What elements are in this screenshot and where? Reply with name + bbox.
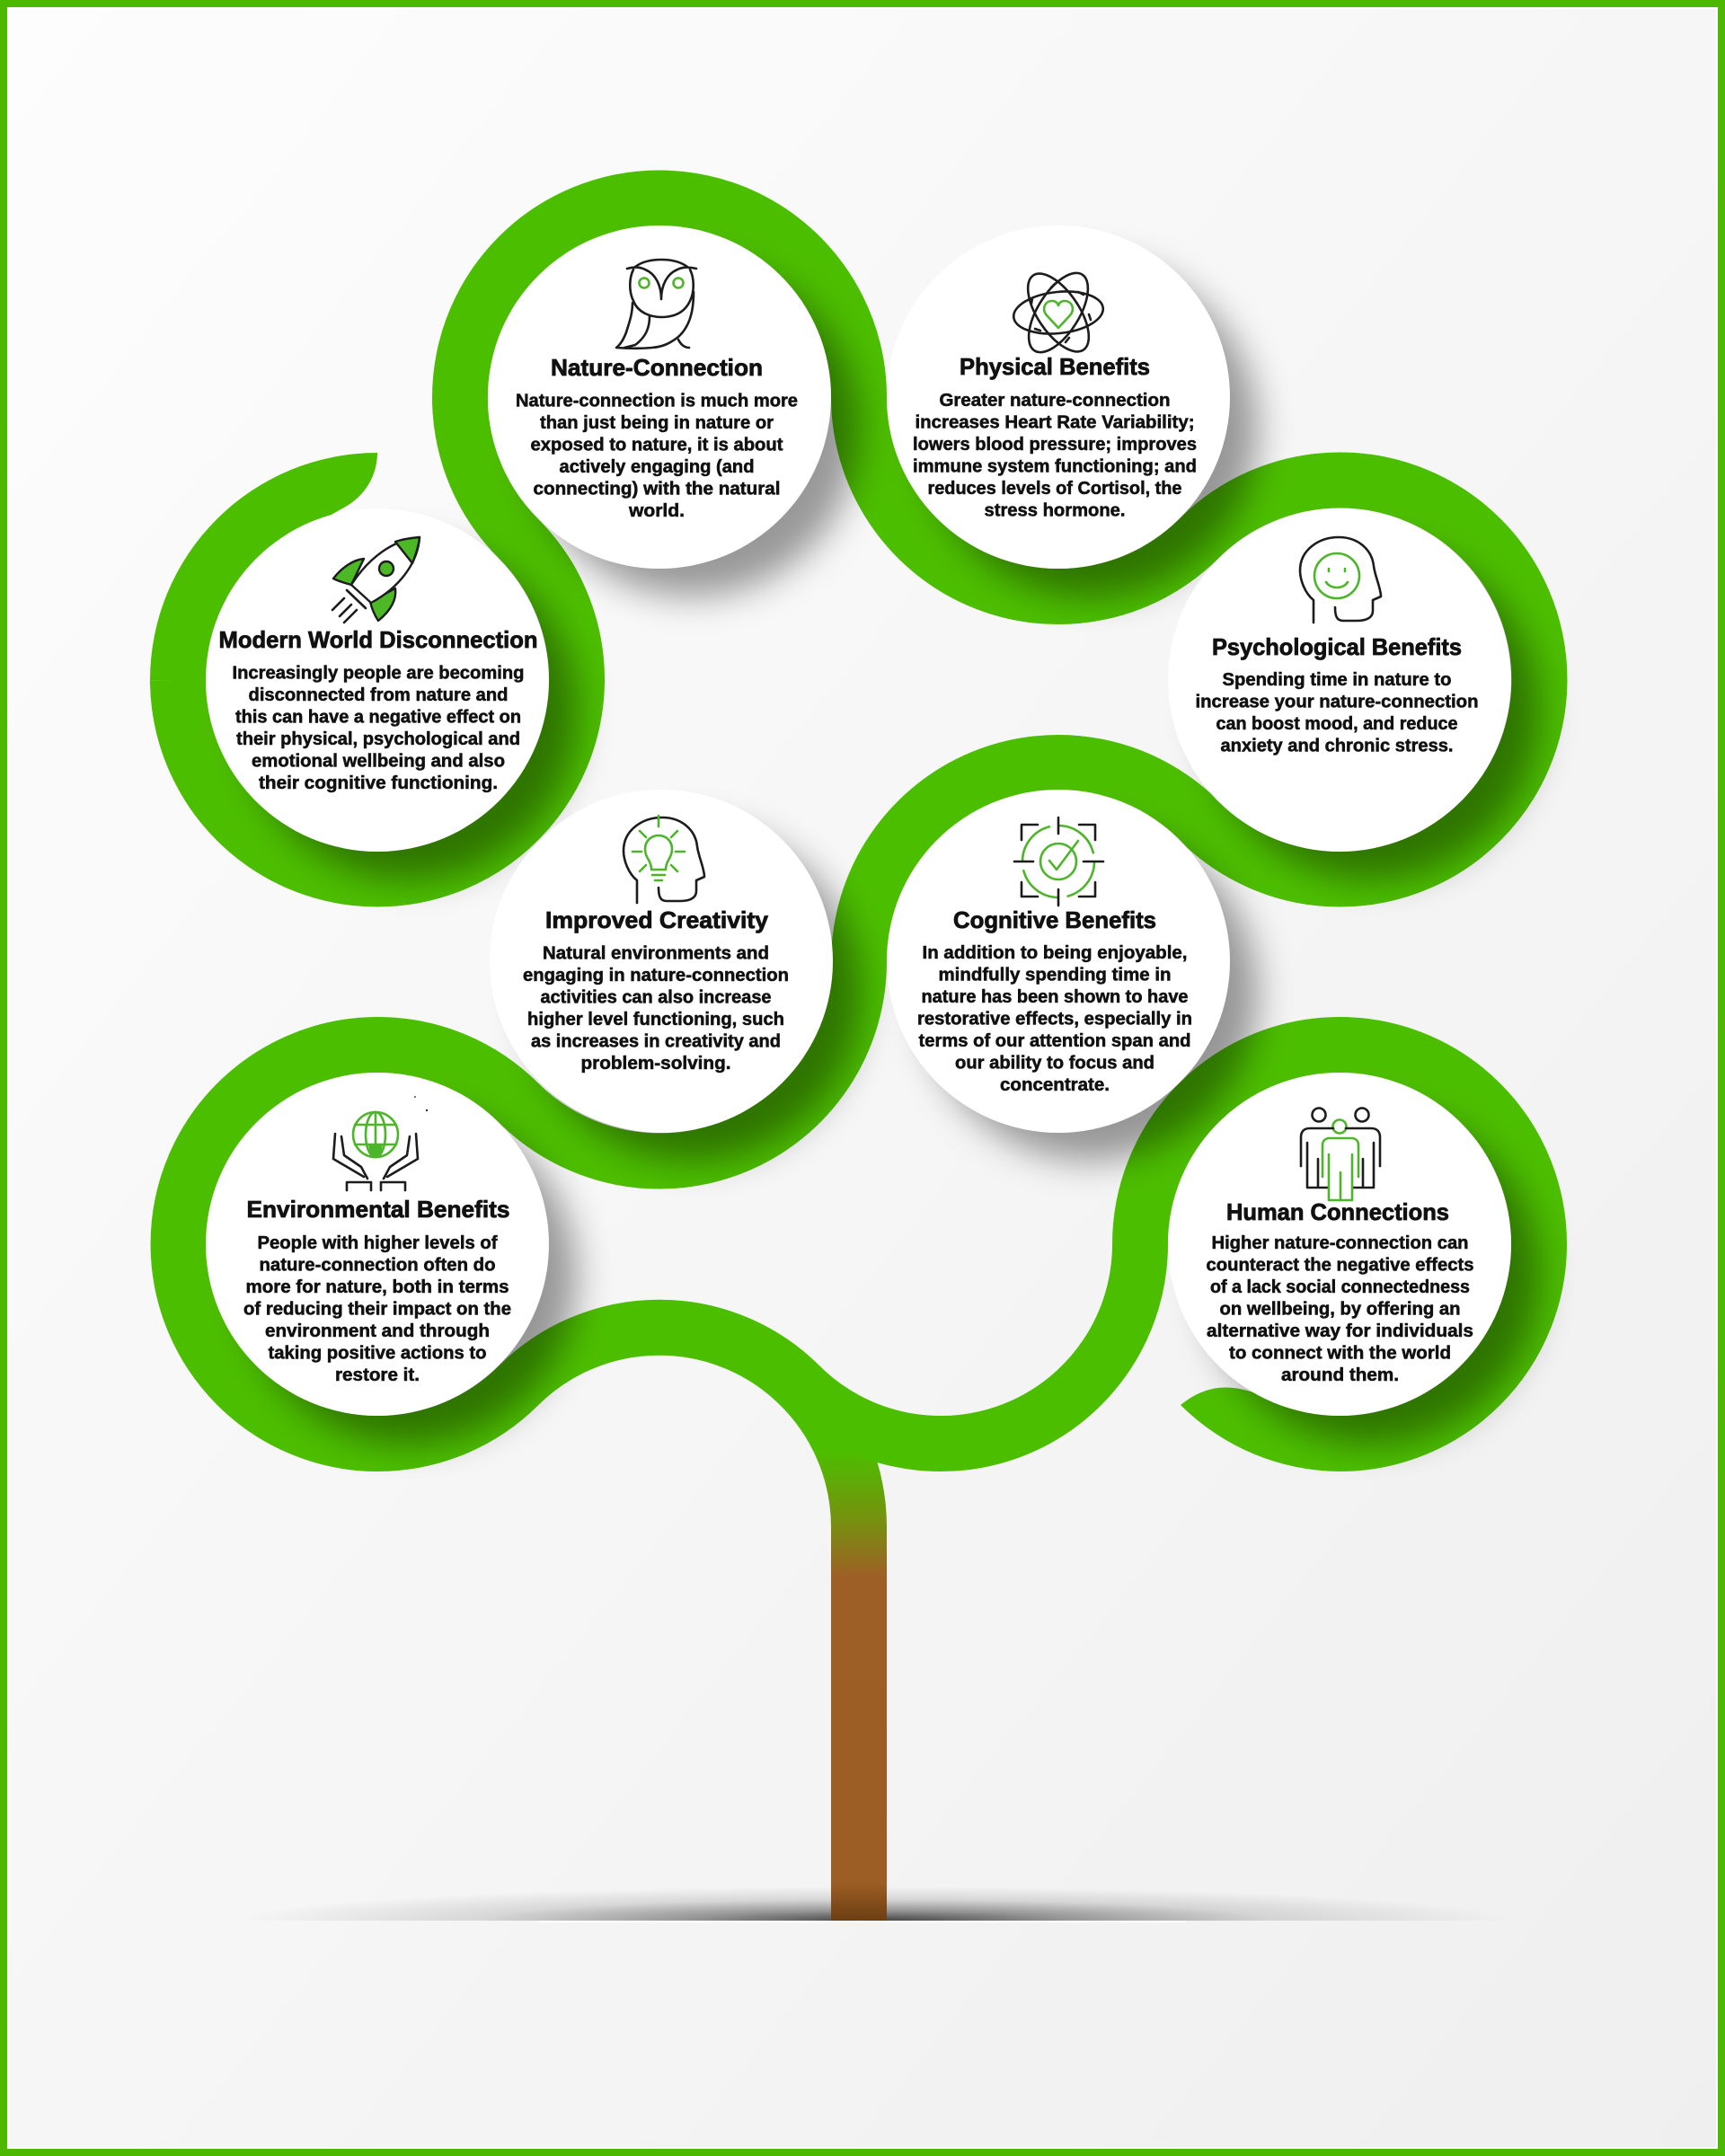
icon: head with lightbulb — [624, 816, 704, 903]
text block: activities can also increase — [541, 987, 771, 1007]
text block: to connect with the world — [1229, 1343, 1451, 1363]
text block: terms of our attention span and — [918, 1031, 1191, 1051]
text block: restorative effects, especially in — [917, 1009, 1192, 1029]
text block: Higher nature-connection can — [1211, 1233, 1468, 1253]
panel: Cognitive Benefits — [887, 790, 1230, 1133]
text block: actively engaging (and — [559, 457, 755, 477]
panel: Improved Creativity — [490, 790, 833, 1133]
panel: Modern World Disconnection — [206, 508, 549, 852]
text block: around them. — [1281, 1365, 1399, 1385]
heading: Human Connections — [1226, 1198, 1449, 1225]
text block: as increases in creativity and — [531, 1031, 781, 1051]
heading: Environmental Benefits — [246, 1196, 510, 1223]
heading: Nature-Connection — [551, 354, 763, 381]
text block — [1195, 670, 1479, 755]
text block — [243, 1233, 511, 1385]
trunk — [800, 1385, 859, 1921]
text block: restore it. — [335, 1365, 420, 1385]
text block: their cognitive functioning. — [259, 773, 498, 793]
green ribbon branches — [150, 199, 1539, 1471]
text block: Nature-connection is much more — [516, 391, 798, 411]
text block: alternative way for individuals — [1207, 1321, 1473, 1341]
text block: exposed to nature, it is about — [530, 435, 783, 455]
text block: reduces levels of Cortisol, the — [927, 479, 1182, 499]
text block: connecting) with the natural — [534, 479, 780, 499]
text block: world. — [628, 501, 685, 521]
text block: People with higher levels of — [257, 1233, 498, 1253]
icon: smiling head — [1300, 537, 1381, 623]
text block: their physical, psychological and — [236, 729, 520, 749]
text block: increase your nature-connection — [1195, 692, 1479, 711]
text block: anxiety and chronic stress. — [1220, 736, 1454, 755]
text block: Greater nature-connection — [940, 391, 1170, 411]
text block: In addition to being enjoyable, — [922, 943, 1188, 963]
text block: lowers blood pressure; improves — [913, 435, 1197, 455]
panel: Psychological Benefits — [1168, 508, 1511, 852]
text block — [917, 943, 1192, 1095]
ground shadow — [234, 1885, 1518, 1921]
heading: Cognitive Benefits — [953, 906, 1156, 933]
text block: environment and through — [265, 1321, 490, 1341]
heading: Psychological Benefits — [1212, 633, 1462, 660]
text block — [913, 391, 1197, 520]
text block: concentrate. — [1000, 1075, 1110, 1095]
icon: target with check — [1014, 817, 1103, 906]
text block: nature-connection often do — [259, 1255, 496, 1275]
text block: immune system functioning; and — [913, 456, 1197, 476]
text block: higher level functioning, such — [527, 1010, 784, 1029]
text block: stress hormone. — [985, 500, 1125, 520]
text block: increases Heart Rate Variability; — [915, 412, 1195, 432]
text block — [523, 943, 789, 1074]
heading: Modern World Disconnection — [219, 626, 537, 653]
panel: Environmental Benefits — [206, 1073, 549, 1416]
panel: Human Connections — [1168, 1073, 1511, 1416]
heading: Improved Creativity — [545, 906, 769, 933]
text block: nature has been shown to have — [922, 987, 1188, 1007]
text block: of a lack social connectedness — [1210, 1277, 1470, 1297]
icon: rocket — [332, 537, 420, 623]
text block: Natural environments and — [543, 943, 769, 963]
text block: than just being in nature or — [540, 413, 774, 433]
text block: our ability to focus and — [955, 1053, 1154, 1073]
text block — [516, 391, 798, 521]
text block: problem-solving. — [580, 1054, 731, 1074]
icon: three people — [1301, 1109, 1380, 1200]
icon: owl — [616, 260, 696, 349]
ground line — [539, 1921, 1186, 1922]
text block: Increasingly people are becoming — [232, 663, 525, 683]
text block: on wellbeing, by offering an — [1220, 1299, 1461, 1319]
icon: atom with heart — [1012, 263, 1105, 362]
text block: counteract the negative effects — [1206, 1255, 1473, 1275]
panel: Nature-Connection — [488, 225, 831, 569]
text block: of reducing their impact on the — [243, 1299, 511, 1319]
icon: hands holding globe — [333, 1096, 428, 1190]
text block: engaging in nature-connection — [523, 966, 789, 985]
text block: emotional wellbeing and also — [252, 751, 505, 771]
text block: disconnected from nature and — [248, 685, 509, 705]
text block: mindfully spending time in — [938, 965, 1172, 985]
circle shadows — [243, 262, 1539, 1444]
heading: Physical Benefits — [960, 353, 1150, 380]
text block: taking positive actions to — [268, 1343, 487, 1363]
text block: more for nature, both in terms — [246, 1277, 509, 1297]
text block: can boost mood, and reduce — [1216, 714, 1457, 734]
text block: Spending time in nature to — [1222, 670, 1452, 690]
text block — [232, 663, 525, 793]
panel: Physical Benefits — [887, 225, 1230, 569]
text block — [1206, 1233, 1473, 1385]
text block: this can have a negative effect on — [235, 707, 521, 727]
